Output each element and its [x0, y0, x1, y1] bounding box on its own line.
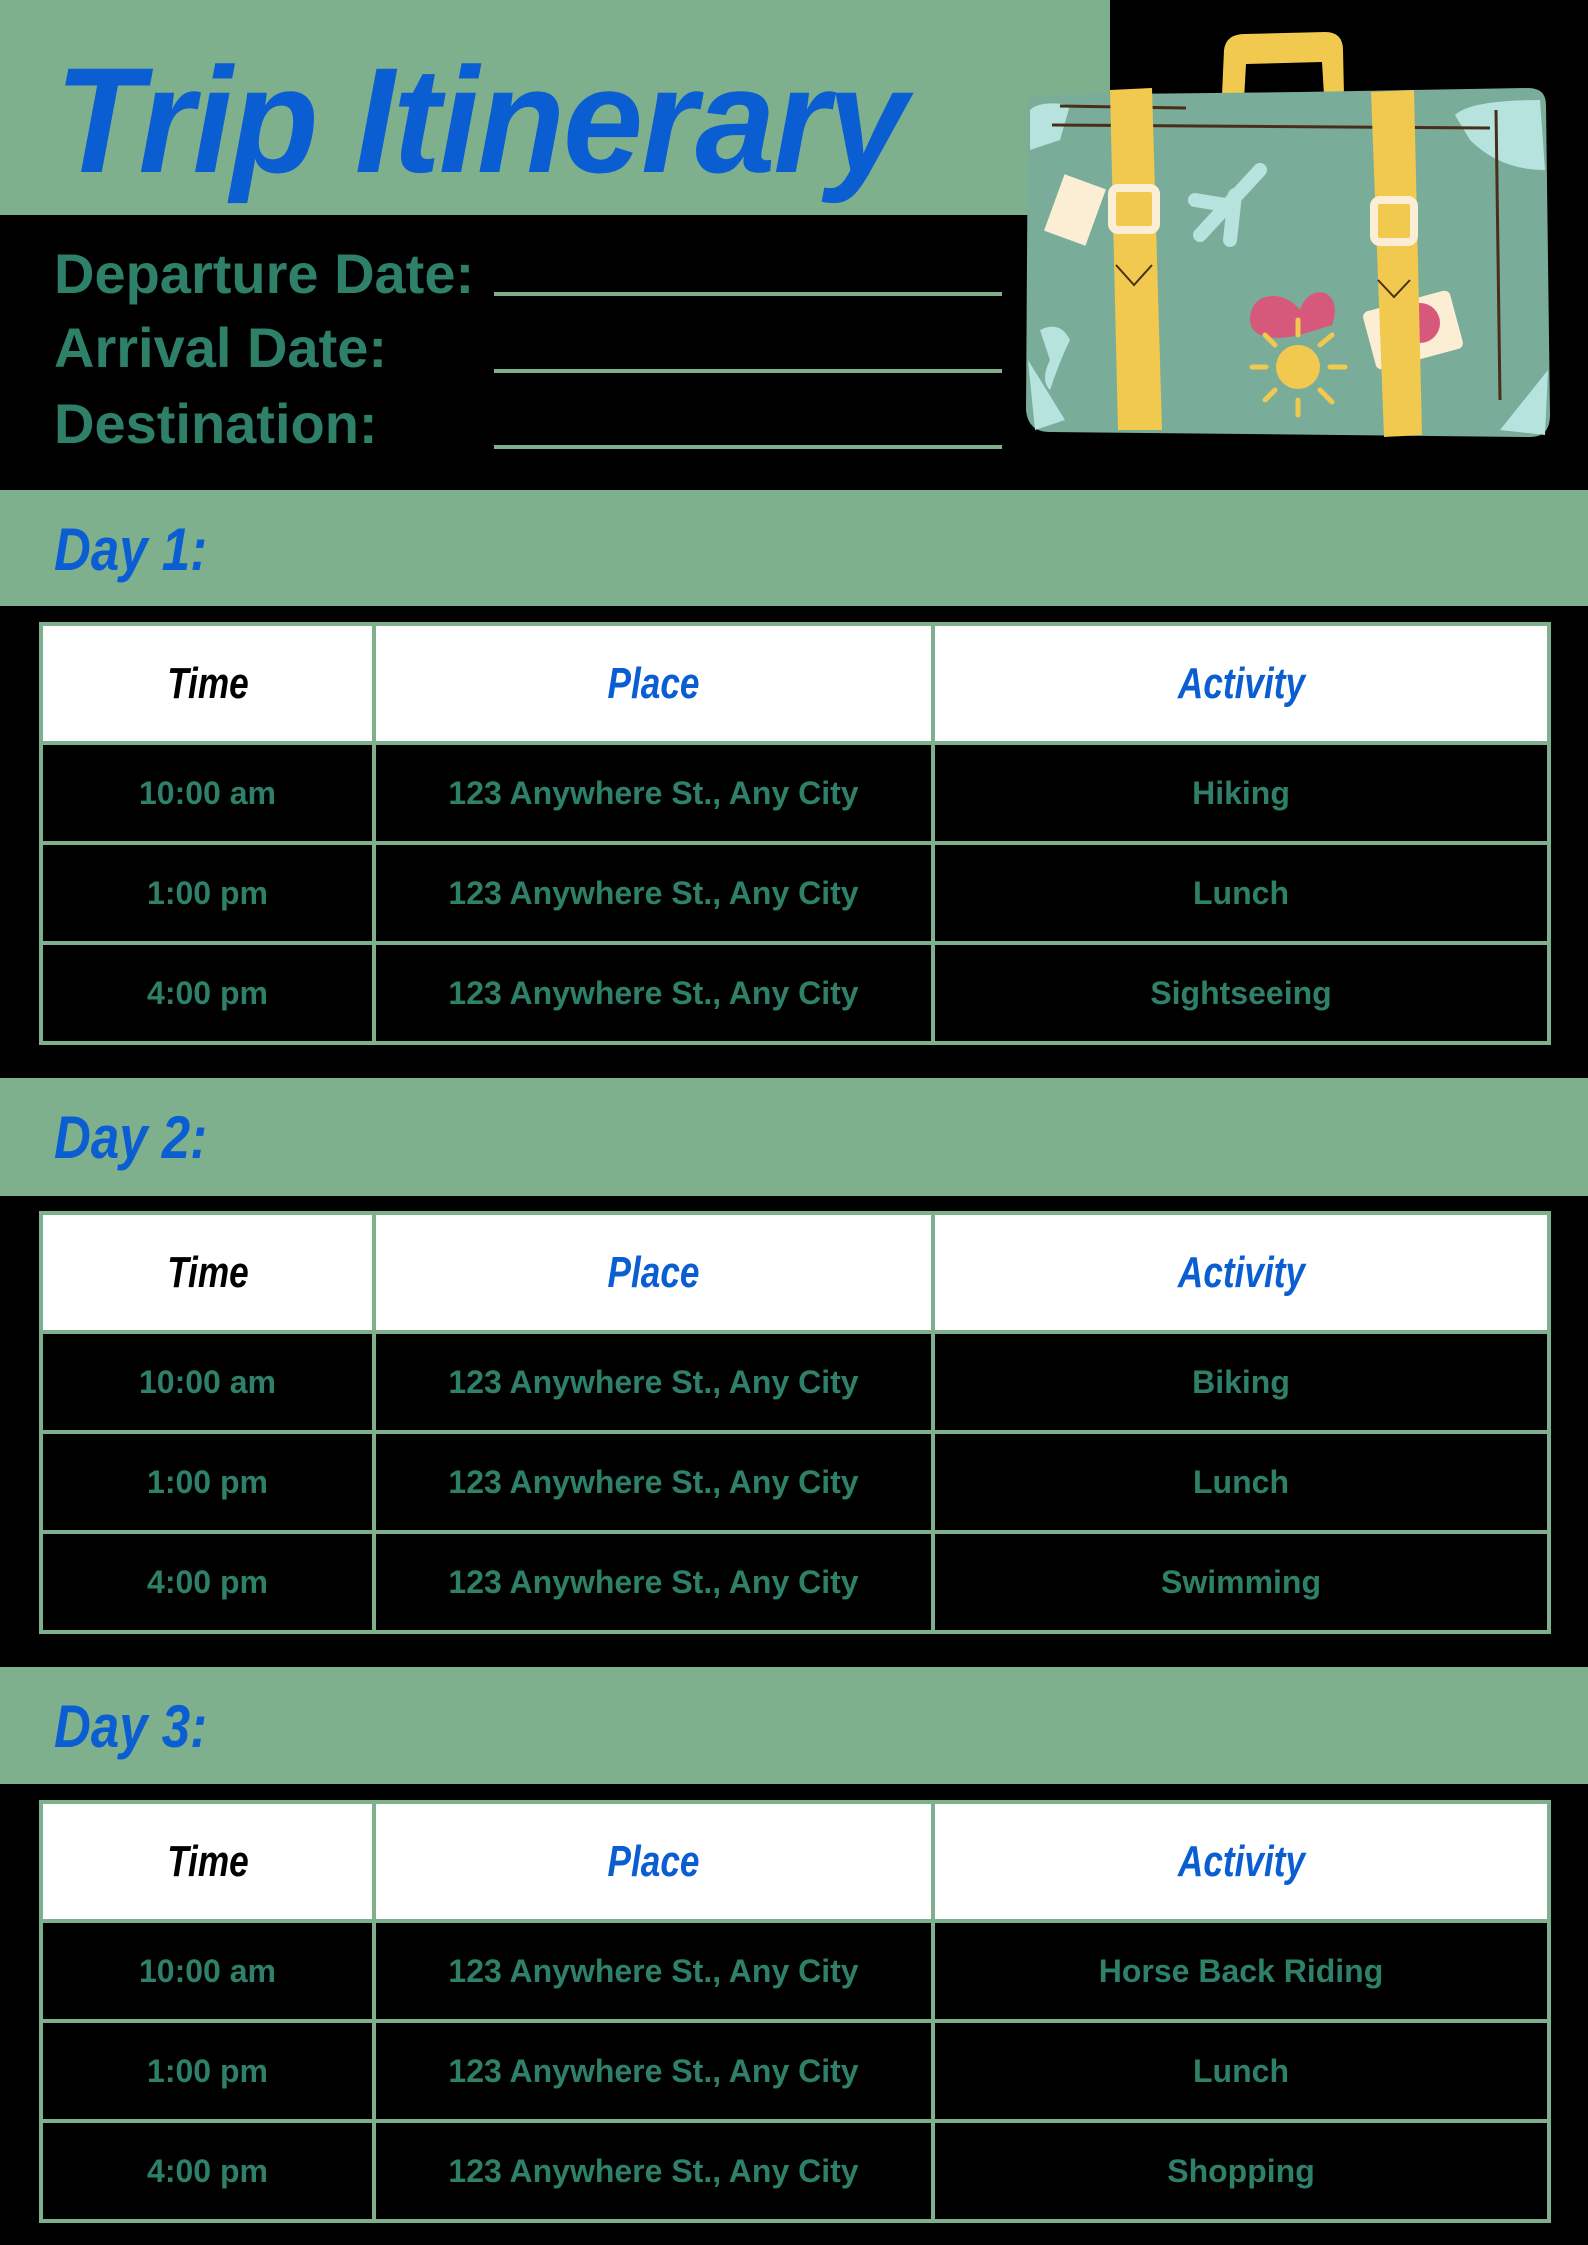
table: day 2: 4:00 pm	[147, 1564, 268, 1600]
table: day 1: Activity	[1177, 658, 1305, 708]
table: day 3: Horse Back Riding	[1099, 1952, 1383, 1988]
table: day 2: 123 Anywhere St., Any City	[448, 1564, 859, 1600]
band: day 3	[0, 1667, 1588, 1784]
table: day 2: 1:00 pm	[147, 1464, 268, 1500]
fill line: destination	[494, 445, 1002, 449]
table: day 1: Time	[167, 658, 248, 708]
table: day 2: Activity	[1177, 1248, 1305, 1296]
table: day 1: 123 Anywhere St., Any City	[448, 974, 859, 1010]
icon: suitcase	[1026, 32, 1550, 437]
header band	[0, 0, 1110, 215]
label: destination: Destination:	[54, 392, 378, 455]
table: day 3: Time	[167, 1836, 248, 1886]
fill line: arrival	[494, 369, 1002, 373]
table: day 1: 4:00 pm	[147, 974, 268, 1010]
table: day 3: Lunch	[1193, 2052, 1289, 2088]
table: day 3: Shopping	[1167, 2152, 1315, 2188]
table: day 3: 123 Anywhere St., Any City	[448, 1952, 859, 1988]
table: day 1: Hiking	[1192, 774, 1290, 810]
table: day 1: 10:00 am	[139, 774, 276, 810]
table: day 2: Place	[607, 1248, 699, 1296]
label: departure date: Departure Date:	[54, 242, 474, 305]
table: day 2	[39, 1211, 1551, 1634]
table: day 3: Place	[607, 1836, 699, 1886]
table: day 3: 4:00 pm	[147, 2152, 268, 2188]
table: day 3: 10:00 am	[139, 1952, 276, 1988]
heading: day 3: Day 3:	[54, 1693, 207, 1760]
heading: day 2: Day 2:	[54, 1104, 207, 1171]
table: day 2: 123 Anywhere St., Any City	[448, 1464, 859, 1500]
band: day 1	[0, 490, 1588, 606]
table: day 2: 123 Anywhere St., Any City	[448, 1364, 859, 1400]
table: day 2: Lunch	[1193, 1464, 1289, 1500]
table: day 2: Swimming	[1161, 1564, 1321, 1600]
fill line: departure	[494, 292, 1002, 296]
table: day 1: 1:00 pm	[147, 874, 268, 910]
table: day 2: Time	[167, 1248, 248, 1296]
table: day 3: 1:00 pm	[147, 2052, 268, 2088]
heading: day 1: Day 1:	[54, 516, 207, 583]
table: day 1	[39, 622, 1551, 1045]
table: day 1: 123 Anywhere St., Any City	[448, 874, 859, 910]
band: day 2	[0, 1078, 1588, 1196]
table: day 2: Biking	[1192, 1364, 1290, 1400]
table: day 3: Activity	[1177, 1836, 1305, 1886]
title: Trip Itinerary	[55, 36, 906, 204]
table: day 3	[39, 1800, 1551, 2223]
table: day 3: 123 Anywhere St., Any City	[448, 2052, 859, 2088]
table: day 2: 10:00 am	[139, 1364, 276, 1400]
label: arrival date: Arrival Date:	[54, 316, 387, 379]
table: day 1: Lunch	[1193, 874, 1289, 910]
table: day 1: 123 Anywhere St., Any City	[448, 774, 859, 810]
table: day 1: Sightseeing	[1150, 974, 1332, 1010]
table: day 3: 123 Anywhere St., Any City	[448, 2152, 859, 2188]
table: day 1: Place	[607, 658, 699, 708]
